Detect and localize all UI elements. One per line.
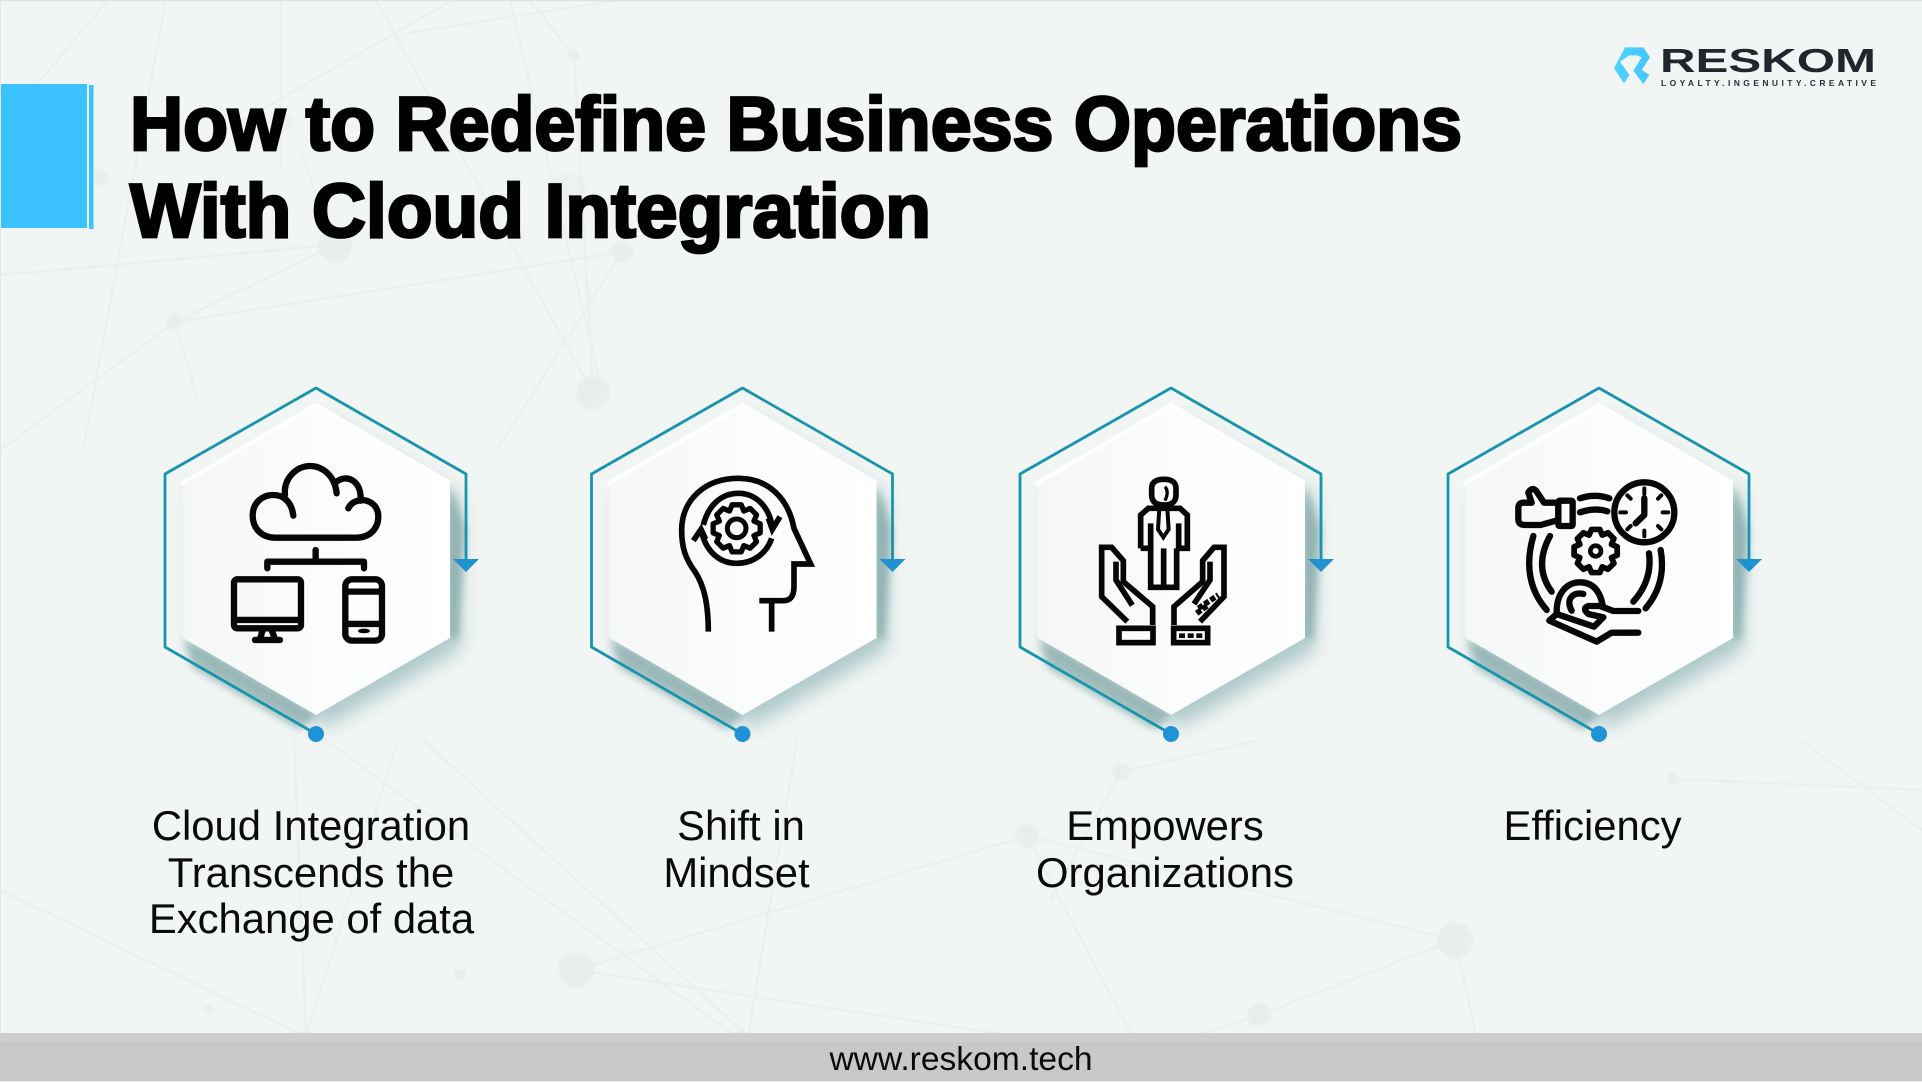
label: shift in mindset: Shift in [677, 802, 805, 849]
footer url: www.reskom.tech [828, 1041, 1093, 1078]
title accent bar [1, 84, 94, 229]
icon: head with gear [682, 478, 811, 632]
panel: efficiency [1448, 388, 1762, 849]
logo mark [1614, 47, 1650, 84]
hexagon card [1020, 388, 1334, 742]
hexagon card [165, 388, 479, 742]
icon: cloud and devices [234, 466, 382, 641]
title: With Cloud Integration [130, 169, 931, 254]
hexagon card [592, 388, 906, 742]
title: How to Redefine Business Operations [130, 82, 1462, 167]
logo wordmark: RESKOM [1660, 42, 1876, 79]
label: empowers organizations: Organizations [1036, 849, 1294, 896]
label: empowers organizations: Empowers [1066, 802, 1264, 849]
label: shift in mindset: Mindset [663, 849, 810, 896]
footer bar [0, 1033, 1922, 1081]
label: efficiency: Efficiency [1503, 802, 1682, 849]
icon: person held by hands [1102, 479, 1224, 643]
logo: Reskom [1614, 42, 1876, 88]
label: cloud integration: Transcends the [168, 849, 454, 896]
hexagon card [1448, 388, 1762, 742]
panel: shift in mindset [592, 388, 906, 896]
panel: empowers organizations [1020, 388, 1334, 896]
logo tagline: LOYALTY.INGENUITY.CREATIVE [1661, 78, 1876, 88]
title [130, 82, 1462, 254]
panel: cloud integration [149, 388, 479, 942]
label: cloud integration: Exchange of data [149, 895, 475, 942]
icon: clock, thumb, gear and coin hand [1518, 482, 1674, 642]
label: cloud integration: Cloud Integration [152, 802, 470, 849]
